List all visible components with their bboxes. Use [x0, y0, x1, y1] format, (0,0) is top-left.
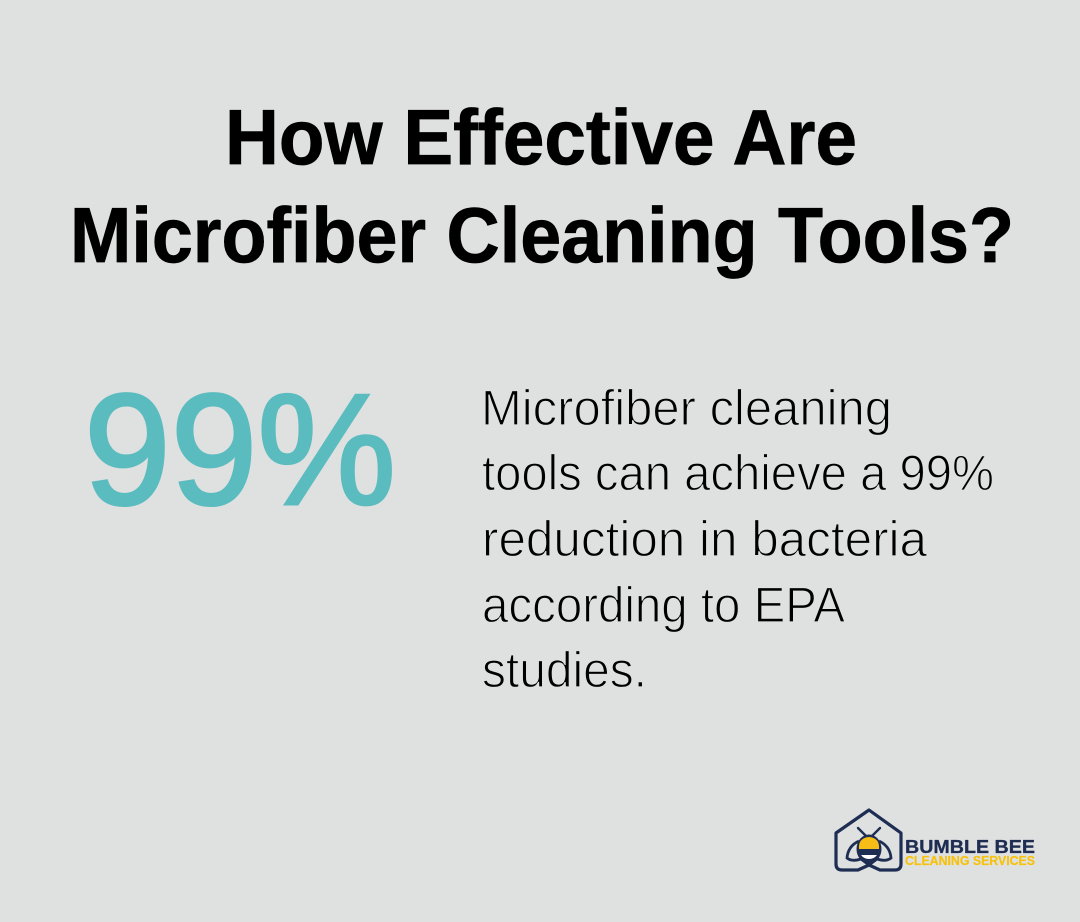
logo wordmark: BUMBLE BEE — [905, 837, 1035, 857]
description text: tools can achieve a 99% — [482, 445, 994, 501]
icon: house outline — [836, 810, 901, 870]
description text — [481, 380, 994, 698]
logo tagline: CLEANING SERVICES — [905, 854, 1035, 868]
title — [70, 93, 1014, 279]
description text: Microfiber cleaning — [481, 380, 892, 436]
description text: according to EPA — [482, 577, 846, 633]
icon: bee — [847, 828, 891, 865]
title: How Effective Are — [225, 93, 857, 181]
description text: reduction in bacteria — [482, 511, 927, 567]
logo: Bumble Bee Cleaning Services — [836, 810, 1035, 870]
description text: studies. — [482, 642, 647, 698]
title: Microfiber Cleaning Tools? — [70, 191, 1014, 279]
statistic: 99%: 99% — [84, 362, 396, 538]
